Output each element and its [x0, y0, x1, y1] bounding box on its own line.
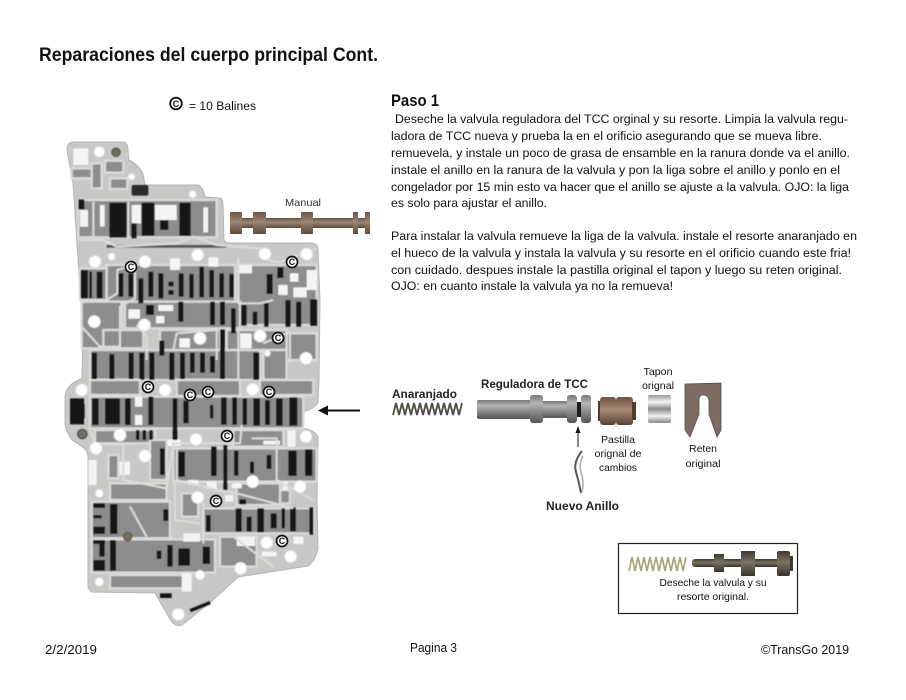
discard text: resorte original. — [677, 592, 749, 603]
lower half of valve body details — [70, 380, 317, 620]
icon: manual valve — [230, 212, 370, 234]
label: pastilla — [594, 435, 642, 474]
text block: first paragraph: es solo para ajustar el anillo. — [391, 196, 547, 210]
icon: tcc regulator valve — [477, 395, 591, 423]
label: nuevo anillo: Nuevo Anillo — [546, 499, 619, 513]
arrow: ring location — [576, 426, 580, 447]
label: tapon: orignal — [642, 381, 674, 392]
checkball location markers: C — [275, 333, 282, 343]
icon: orange spring — [393, 403, 462, 415]
title: Reparaciones del cuerpo principal Cont. — [39, 44, 378, 66]
valve body illustration — [65, 142, 320, 626]
text block: first paragraph: congelador por 15 min esto va hacer que el anillo se ajuste a la valvula. OJO: la liga — [391, 180, 849, 194]
text block: second paragraph: Para instalar la valvula remueve la liga de la valvula. instale el resorte anaranjado en — [391, 229, 857, 243]
icon: old valve — [692, 551, 793, 576]
footer: date: 2/2/2019 — [45, 643, 97, 657]
checkball location markers: C — [224, 431, 231, 441]
label: reguladora de tcc: Reguladora de TCC — [481, 377, 588, 391]
text block: first paragraph: instale el anillo en la ranura de la valvula y pon la liga sobre el anillo y ponlo en el — [391, 163, 840, 177]
checkball location markers: C — [279, 536, 286, 546]
label: reten — [686, 444, 720, 470]
text block: second paragraph: el hueco de la valvula y instala la valvula y su resorte en el orificio cuando este fria! — [391, 246, 851, 260]
heading: paso 1: Paso 1 — [391, 92, 439, 110]
text block: first paragraph: ladora de TCC nueva y prueba la en el orificio asegurando que se mueva libre. — [391, 129, 822, 143]
checkball location markers: C — [145, 382, 152, 392]
manual valve label: Manual — [285, 198, 321, 209]
text block: second paragraph: con cuidado. despues instale la pastilla original el tapon y luego su reten original. — [391, 263, 842, 277]
discard text: Deseche la valvula y su — [660, 578, 767, 589]
label: reten: Reten — [689, 444, 717, 455]
checkball location markers: C — [205, 387, 212, 397]
text block: second paragraph — [391, 229, 857, 293]
icon: new ring — [575, 451, 583, 493]
icon: original plug — [648, 395, 671, 423]
footer: page number: Pagina 3 — [410, 641, 457, 655]
text block: first paragraph: Deseche la valvula reguladora del TCC orginal y su resorte. Limpia la valvula regu- — [395, 112, 848, 126]
label: pastilla: cambios — [599, 463, 637, 474]
checkball location markers: C — [187, 390, 194, 400]
upper half of valve body details — [72, 146, 317, 380]
label: tapon: Tapon — [644, 367, 673, 378]
footer: copyright: ©TransGo 2019 — [761, 643, 849, 657]
label: reten: original — [686, 459, 720, 470]
checkball location markers — [126, 256, 298, 546]
label: anaranjado: Anaranjado — [392, 387, 457, 401]
label: pastilla: Pastilla — [601, 435, 635, 446]
label: tapon — [642, 367, 674, 392]
legend: checkball symbol = 10 balines: = 10 Balines — [189, 99, 256, 113]
arrow: pointing at valve bore — [318, 406, 360, 416]
discard text — [660, 578, 767, 603]
checkball location markers: C — [289, 257, 296, 267]
checkball location markers: C — [266, 387, 273, 397]
text block: second paragraph: OJO: en cuanto instale la valvula ya no la remueva! — [391, 279, 673, 293]
panel: discard note — [618, 544, 798, 614]
icon: old spring — [629, 557, 686, 571]
legend: checkball symbol = 10 balines: C — [173, 99, 180, 109]
label: pastilla: orignal de — [594, 449, 642, 460]
checkball location markers: C — [128, 262, 135, 272]
text block: first paragraph — [391, 112, 850, 210]
checkball location markers: C — [213, 496, 220, 506]
icon: original retainer — [685, 383, 721, 437]
text block: first paragraph: remuevela, y instale un poco de grasa de ensamble en la ranura donde va el anillo. — [391, 146, 850, 160]
icon: original shift plug — [598, 397, 636, 425]
